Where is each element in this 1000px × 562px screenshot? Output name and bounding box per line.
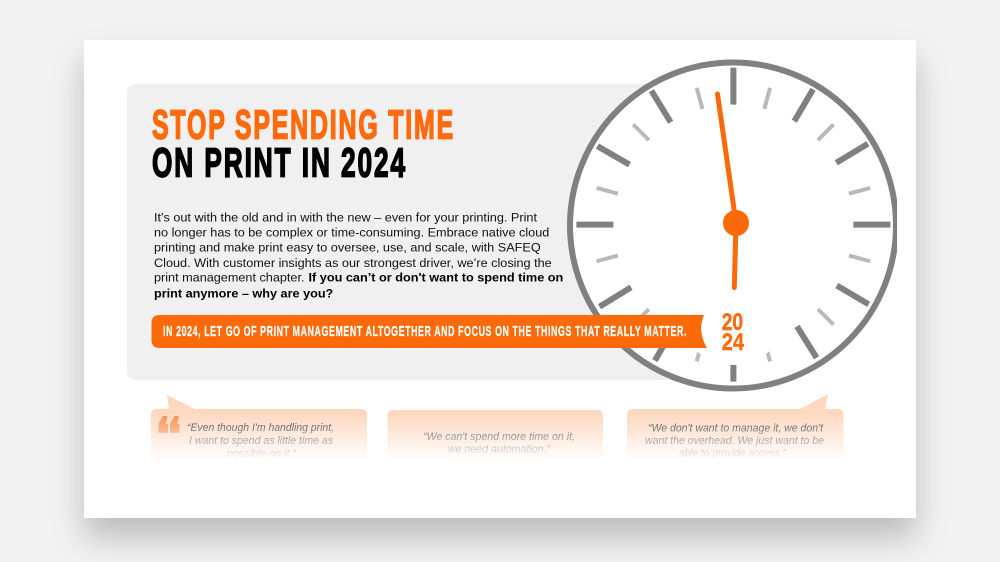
year label: 24 — [722, 329, 744, 356]
year label: 20 — [722, 309, 743, 336]
quote cards — [151, 394, 844, 464]
quote text 1 — [187, 422, 334, 460]
quote text 3: able to provide access.” — [679, 448, 787, 460]
quote text 3 — [645, 422, 824, 460]
banner: IN 2024, LET GO OF PRINT MANAGEMENT ALTOGETHER AND FOCUS ON THE THINGS THAT REALLY MATTER. — [163, 324, 687, 340]
body text: Cloud. With customer insights as our strongest driver, we’re closing the — [154, 256, 552, 270]
body text: print anymore – why are you? — [154, 286, 333, 300]
quote text 1: I want to spend as little time as — [189, 435, 333, 447]
quote text 2: “We can't spend more time on it, — [423, 431, 575, 443]
clock — [570, 62, 896, 388]
title: STOP SPENDING TIME — [152, 102, 455, 148]
body text — [154, 211, 563, 300]
quote card 3 — [627, 394, 844, 464]
title — [152, 102, 455, 186]
minor ticks — [597, 88, 870, 361]
major hour ticks — [576, 68, 890, 382]
white patch behind year — [697, 340, 770, 365]
quote text 3: want the overhead. We just want to be — [645, 435, 824, 447]
quote text 1: possible on it.” — [226, 448, 297, 460]
banner — [152, 315, 707, 348]
quote card 2 — [388, 410, 603, 464]
clock face and ring — [570, 62, 896, 388]
body text: printing and make print easy to oversee, use, and scale, with SAFEQ — [154, 241, 541, 255]
quote text 1: “Even though I'm handling print, — [187, 422, 334, 434]
clock hands — [718, 94, 746, 288]
quote text 2: we need automation.” — [448, 444, 551, 456]
body text: It's out with the old and in with the new – even for your printing. Print — [154, 211, 538, 225]
year label — [722, 309, 744, 356]
quote card 1 — [151, 395, 367, 464]
slide card — [84, 40, 916, 518]
body text: If you can’t or don't want to spend time on — [308, 271, 563, 285]
quote text 3: “We don't want to manage it, we don't — [648, 422, 824, 434]
panel: grey intro background — [127, 84, 687, 380]
title: ON PRINT IN 2024 — [152, 140, 407, 186]
body text: no longer has to be complex or time-consuming. Embrace native cloud — [154, 226, 549, 240]
body text: print management chapter. — [154, 271, 304, 285]
icon: quotation mark — [158, 416, 180, 433]
quote text 2 — [423, 431, 575, 456]
